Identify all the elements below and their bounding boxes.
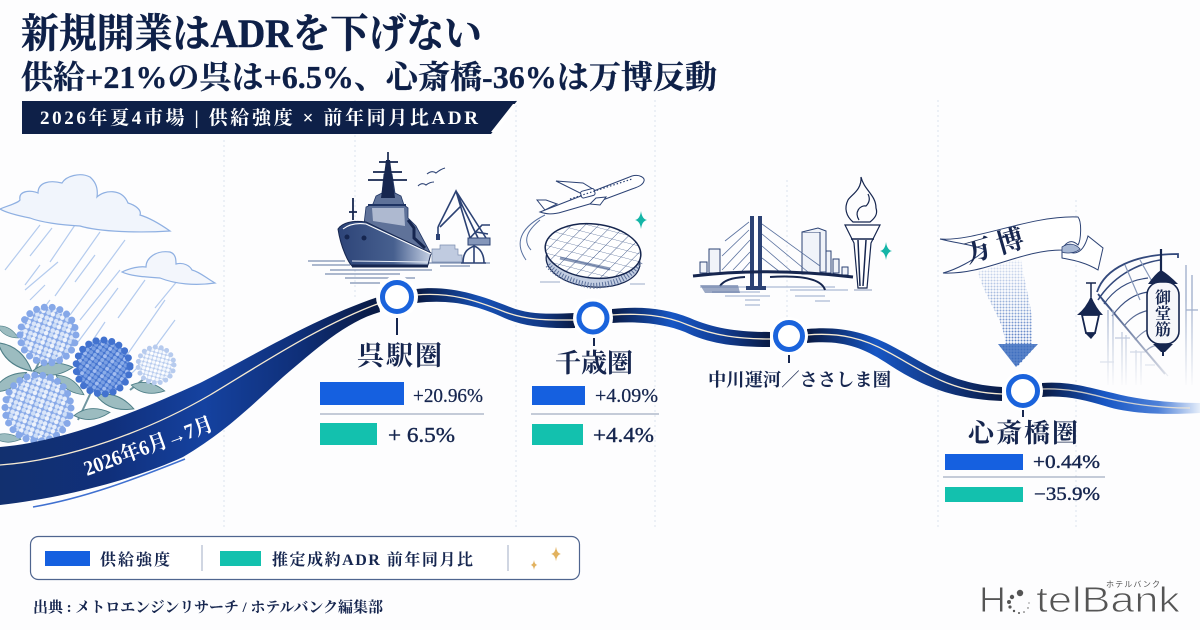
subtitle banner xyxy=(22,101,517,134)
ADR value: −35.9% xyxy=(1034,485,1100,505)
legend swatch: supply xyxy=(45,551,90,566)
logo: HotelBank: ホテルバンク xyxy=(1106,579,1160,590)
banner: 万博 xyxy=(940,217,1103,273)
legend label: ADR: 推定成約ADR 前年同月比 xyxy=(272,550,473,569)
illustration: bridge and torch xyxy=(693,177,892,305)
legend xyxy=(30,536,580,580)
wafer xyxy=(544,231,642,291)
building xyxy=(432,245,462,262)
crane xyxy=(438,191,490,263)
node: 心斎橋圏 xyxy=(1003,371,1043,417)
ribbon segment 4 xyxy=(807,328,1002,401)
logo: HotelBank: H xyxy=(979,579,1006,620)
timeline ribbon xyxy=(0,288,1200,507)
illustration: aeroplane and wafer xyxy=(520,175,647,291)
node: 千歳圏 xyxy=(573,298,613,346)
ribbon label: 2026年6月→7月 xyxy=(81,412,217,481)
panel: 呉駅圏 xyxy=(320,341,484,447)
banner: 万博: 万博 xyxy=(961,222,1033,269)
area name: 心斎橋圏 xyxy=(968,419,1078,448)
cables xyxy=(722,222,820,272)
heading line 2: 供給+21%の呉は+6.5%、心斎橋-36%は万博反動 xyxy=(21,59,717,95)
lantern text: 御 xyxy=(1155,289,1171,307)
legend swatch: ADR xyxy=(220,551,261,566)
ADR value: + 6.5% xyxy=(388,423,455,447)
birds xyxy=(418,168,445,186)
area name: 呉駅圏 xyxy=(357,341,442,371)
subtitle banner: 2026年夏4市場 | 供給強度 × 前年同月比ADR xyxy=(40,106,478,129)
sparkle xyxy=(635,211,647,229)
small cloud xyxy=(122,252,215,284)
logo: HotelBank: telBank xyxy=(1036,579,1181,620)
ADR value: +4.4% xyxy=(593,423,654,447)
superstructure xyxy=(364,174,431,254)
supply bar xyxy=(320,382,404,405)
title xyxy=(21,11,717,95)
water xyxy=(308,261,490,283)
supply bar xyxy=(945,454,1023,470)
lantern text: 堂 xyxy=(1155,304,1171,323)
node: 中川運河 xyxy=(770,317,808,363)
ribbon segment 1 xyxy=(0,297,380,505)
illustration: hydrangeas xyxy=(0,307,174,443)
lantern text xyxy=(1155,289,1171,339)
towers and deck xyxy=(750,216,762,286)
lantern xyxy=(1147,249,1179,356)
sparkle xyxy=(880,242,892,260)
logo mark xyxy=(1007,590,1030,614)
buildings xyxy=(700,228,848,275)
logo: HotelBank xyxy=(979,579,1181,620)
torch xyxy=(845,225,880,288)
ribbon segment 3 xyxy=(612,308,770,347)
area name: 千歳圏 xyxy=(555,349,633,378)
arrow: Expo impact xyxy=(978,258,1038,367)
heading line 1: 新規開業はADRを下げない xyxy=(21,11,482,56)
supply value: +4.09% xyxy=(595,386,658,407)
ADR bar xyxy=(532,424,583,445)
hull xyxy=(338,221,431,266)
plane xyxy=(537,175,644,214)
lantern text: 筋 xyxy=(1155,320,1171,339)
ADR bar xyxy=(320,423,377,445)
ADR bar xyxy=(945,487,1023,502)
label: 中川運河／ささしま圏: 中川運河／ささしま圏 xyxy=(708,370,891,390)
legend label: supply: 供給強度 xyxy=(100,550,170,569)
ribbon segment 2 xyxy=(416,288,575,328)
illustration: rain clouds xyxy=(0,175,215,385)
hanging lamp xyxy=(1077,283,1103,339)
supply value: +0.44% xyxy=(1033,453,1100,473)
cloud xyxy=(0,175,170,232)
ribbon segment 5 xyxy=(1042,383,1200,414)
node: 呉駅圏 xyxy=(376,276,418,335)
panel: 心斎橋圏 xyxy=(943,419,1105,505)
illustration: destroyer and harbour crane xyxy=(308,152,490,283)
supply bar xyxy=(532,386,585,405)
supply value: +20.96% xyxy=(413,386,483,407)
swoosh xyxy=(520,215,545,260)
sparkles xyxy=(531,547,561,570)
source: 出典 : メトロエンジンリサーチ / ホテルバンク編集部 xyxy=(33,598,383,616)
panel: 千歳圏 xyxy=(531,349,659,447)
illustration: Shinsaibashi arcade xyxy=(1077,249,1198,385)
water xyxy=(700,287,848,305)
